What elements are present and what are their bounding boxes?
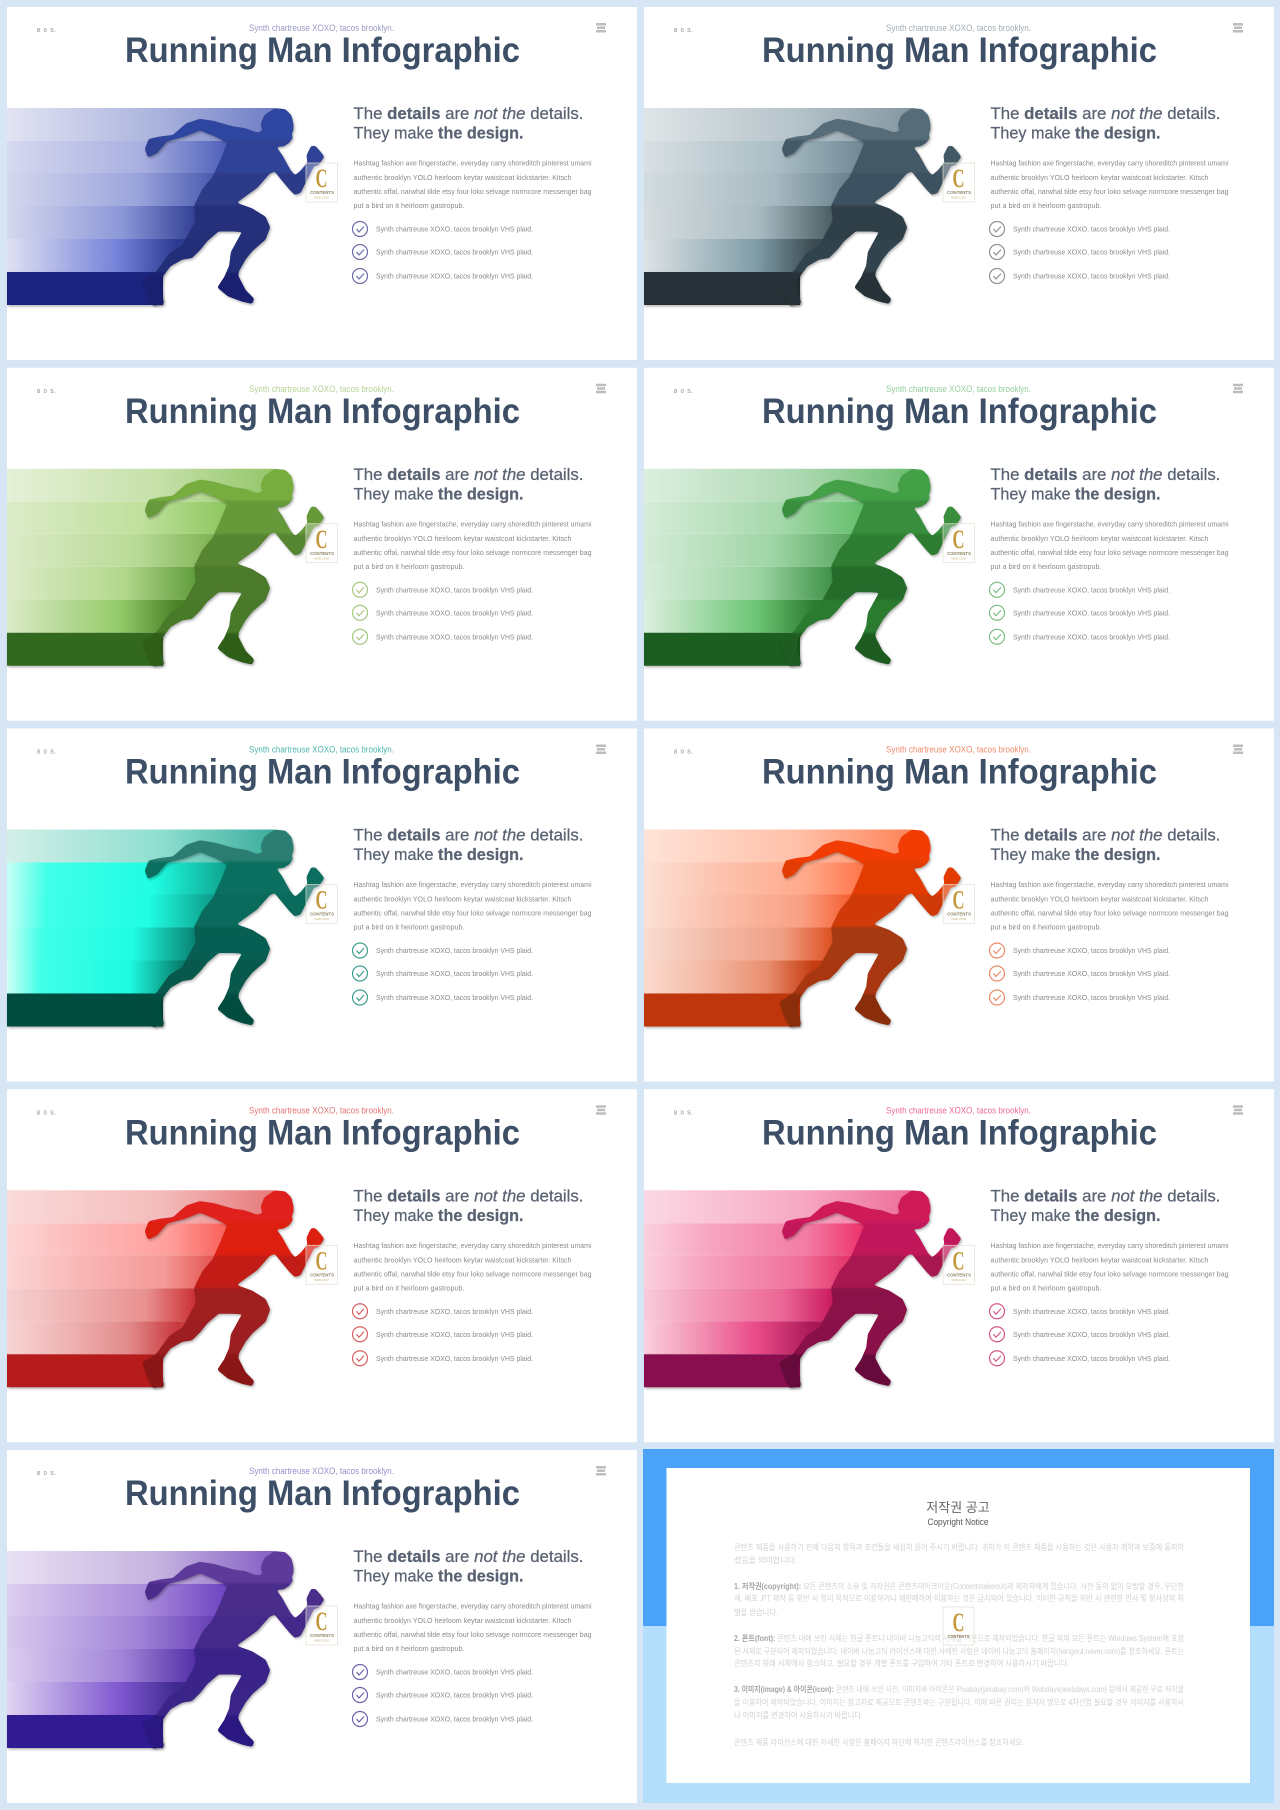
body paragraph: Hashtag fashion axe fingerstache, everyday carry shoreditch pinterest umami (354, 519, 592, 528)
heading (990, 104, 1220, 142)
panel: slate running man (644, 7, 1274, 360)
watermark logo (306, 1606, 338, 1645)
checklist (352, 1664, 533, 1726)
checklist (990, 943, 1170, 1005)
body paragraph: authentic brooklyn YOLO heirloom keytar waistcoat kickstarter. Kitsch (990, 1255, 1208, 1264)
notice closing line: 콘텐츠 제품 라이선스에 대한 자세한 사항은 홈페이지 하단에 위치한 콘텐츠라이선스를 참조하세요. (734, 1737, 1024, 1747)
checklist (352, 1304, 533, 1366)
checklist: Synth chartreuse XOXO, tacos brooklyn VHS plaid. (376, 1330, 533, 1339)
checklist: Synth chartreuse XOXO, tacos brooklyn VHS plaid. (1013, 248, 1170, 256)
motion bands (644, 830, 923, 1026)
watermark logo: C (952, 1608, 964, 1637)
watermark logo: CONTENTS (310, 551, 334, 556)
page label: 8 0 S. (674, 750, 694, 756)
heading: The details are not the details. (354, 826, 584, 844)
body paragraph: authentic brooklyn YOLO heirloom keytar waistcoat kickstarter. Kitsch (990, 534, 1208, 543)
heading: They make the design. (354, 1206, 524, 1225)
checklist: Synth chartreuse XOXO, tacos brooklyn VHS plaid. (376, 1714, 533, 1724)
motion bands (7, 1551, 286, 1748)
watermark logo (943, 884, 974, 924)
body paragraph: Hashtag fashion axe fingerstache, everyday carry shoreditch pinterest umami (990, 519, 1229, 528)
watermark logo: CONTENTS (310, 1633, 334, 1638)
body paragraph (990, 519, 1229, 571)
notice section 1: 재, 배포 ,PT 제작 등 위반 시 영리 목적으로 이용하거나 재판매하여 이용하는 것은 금지되어 있습니다. 이러한 규칙을 위반 시 관련한 민사 및 형사상의 처 (734, 1593, 1184, 1603)
title: Running Man Infographic (125, 1113, 520, 1152)
body paragraph (990, 158, 1229, 210)
body paragraph: authentic brooklyn YOLO heirloom keytar waistcoat kickstarter. Kitsch (354, 1255, 572, 1264)
subtitle: Synth chartreuse XOXO, tacos brooklyn. (249, 1105, 394, 1115)
body paragraph: authentic offal, narwhal tilde etsy four loko selvage normcore messenger bag (990, 187, 1228, 196)
icon: menu stack (596, 1105, 606, 1115)
notice section 1 (734, 1581, 1184, 1617)
icon: menu stack (596, 1466, 606, 1476)
notice section 1: 벌을 받습니다. (734, 1607, 778, 1617)
page label: 8 0 S. (37, 1471, 57, 1477)
motion bands (644, 1190, 923, 1387)
checklist: Synth chartreuse XOXO, tacos brooklyn VHS plaid. (376, 224, 533, 234)
title: Running Man Infographic (762, 1113, 1157, 1152)
notice section 2: 2. 폰트(font): 콘텐츠 내에 쓰인 서체는 한글 폰트나 네이버 나눔고딕의 서체를 기본으로 제작되었습니다. 한글 외의 모든 폰트는 Windows System에 포함 (734, 1633, 1185, 1643)
watermark logo: CONTENTS (947, 551, 971, 556)
panel: lime running man (7, 368, 637, 721)
notice section 3 (734, 1684, 1184, 1720)
checklist: Synth chartreuse XOXO, tacos brooklyn VHS plaid. (1013, 272, 1170, 280)
watermark logo (943, 524, 974, 563)
body paragraph: put a bird on it heirloom gastropub. (354, 922, 464, 932)
page label: 8 0 S. (37, 28, 57, 34)
body paragraph: put a bird on it heirloom gastropub. (990, 922, 1102, 932)
heading: The details are not the details. (354, 104, 584, 123)
motion bands (644, 108, 923, 305)
checklist (990, 1304, 1170, 1366)
notice section 3: 을 이용하여 제작되었습니다. 이미지는 참고자료 제공으로 콘텐츠와는 구분됩니다. 이에 따른 권리는 원저자 명으로 4차산업 필요할 경우 이미지를 사용하시 (734, 1697, 1184, 1707)
panel: teal running man (7, 728, 637, 1082)
body paragraph (354, 880, 592, 932)
body paragraph (990, 880, 1229, 932)
notice intro: 셨음을 의미합니다. (734, 1555, 797, 1565)
panel: copyright notice (643, 1449, 1274, 1803)
watermark logo (943, 163, 974, 202)
watermark logo: WEB.COM (314, 1638, 329, 1642)
body paragraph: authentic brooklyn YOLO heirloom keytar waistcoat kickstarter. Kitsch (354, 894, 572, 904)
watermark logo: C (952, 1246, 964, 1275)
page label: 8 0 S. (37, 1110, 57, 1116)
body paragraph: put a bird on it heirloom gastropub. (990, 562, 1102, 571)
body paragraph: Hashtag fashion axe fingerstache, everyday carry shoreditch pinterest umami (354, 1241, 592, 1250)
watermark logo: C (316, 886, 328, 914)
body paragraph: authentic brooklyn YOLO heirloom keytar waistcoat kickstarter. Kitsch (990, 894, 1208, 904)
runner silhouette (143, 470, 323, 666)
body paragraph: authentic offal, narwhal tilde etsy four loko selvage normcore messenger bag (354, 548, 592, 557)
watermark logo: WEB.COM (314, 917, 329, 921)
body paragraph: Hashtag fashion axe fingerstache, everyday carry shoreditch pinterest umami (354, 158, 592, 168)
checklist: Synth chartreuse XOXO, tacos brooklyn VHS plaid. (376, 993, 533, 1002)
title: Running Man Infographic (125, 752, 520, 792)
subtitle: Synth chartreuse XOXO, tacos brooklyn. (249, 23, 394, 33)
icon: menu stack (596, 744, 606, 754)
watermark logo: WEB.COM (314, 1278, 329, 1282)
watermark logo: CONTENTS (310, 190, 334, 195)
subtitle: Synth chartreuse XOXO, tacos brooklyn. (886, 384, 1031, 394)
panel: purple running man (7, 1450, 637, 1803)
notice subtitle: Copyright Notice (928, 1517, 988, 1527)
runner silhouette (143, 1191, 323, 1387)
heading (990, 826, 1220, 864)
body paragraph: put a bird on it heirloom gastropub. (990, 1283, 1102, 1292)
runner silhouette (143, 830, 323, 1026)
heading: The details are not the details. (990, 1186, 1220, 1205)
page label: 8 0 S. (674, 1110, 694, 1116)
watermark logo: C (952, 886, 964, 914)
runner silhouette (143, 109, 323, 305)
body paragraph (354, 1602, 592, 1653)
watermark logo: WEB.COM (951, 1278, 966, 1282)
watermark logo: WEB.COM (951, 556, 966, 560)
body paragraph (990, 1241, 1229, 1292)
body paragraph: Hashtag fashion axe fingerstache, everyday carry shoreditch pinterest umami (990, 158, 1229, 168)
icon: menu stack (1233, 384, 1243, 393)
checklist: Synth chartreuse XOXO, tacos brooklyn VHS plaid. (376, 608, 533, 617)
body paragraph: Hashtag fashion axe fingerstache, everyday carry shoreditch pinterest umami (354, 880, 592, 889)
checklist: Synth chartreuse XOXO, tacos brooklyn VHS plaid. (376, 1668, 533, 1676)
page label: 8 0 S. (674, 389, 694, 395)
body paragraph (354, 158, 592, 210)
page label: 8 0 S. (37, 389, 57, 395)
title: Running Man Infographic (125, 392, 520, 431)
notice section 3: 나 이미지를 변경하여 사용하시기 바랍니다. (734, 1710, 863, 1720)
body paragraph: put a bird on it heirloom gastropub. (354, 1283, 464, 1292)
body paragraph: Hashtag fashion axe fingerstache, everyday carry shoreditch pinterest umami (354, 1602, 592, 1610)
body paragraph: authentic brooklyn YOLO heirloom keytar waistcoat kickstarter. Kitsch (354, 173, 572, 182)
heading: The details are not the details. (990, 826, 1220, 844)
checklist (352, 943, 533, 1005)
body paragraph: authentic offal, narwhal tilde etsy four loko selvage normcore messenger bag (990, 548, 1228, 557)
page label: 8 0 S. (674, 28, 694, 34)
body paragraph: put a bird on it heirloom gastropub. (354, 562, 464, 571)
heading: The details are not the details. (354, 465, 584, 484)
body paragraph: put a bird on it heirloom gastropub. (354, 201, 464, 210)
checklist (990, 222, 1170, 284)
panel: orange running man (644, 728, 1274, 1082)
checklist: Synth chartreuse XOXO, tacos brooklyn VHS plaid. (376, 585, 533, 594)
checklist: Synth chartreuse XOXO, tacos brooklyn VHS plaid. (1013, 585, 1170, 594)
title: Running Man Infographic (762, 392, 1157, 431)
icon: menu stack (596, 384, 606, 393)
checklist: Synth chartreuse XOXO, tacos brooklyn VHS plaid. (376, 1690, 533, 1700)
heading (354, 465, 584, 503)
subtitle: Synth chartreuse XOXO, tacos brooklyn. (886, 23, 1031, 33)
icon: menu stack (1233, 1105, 1243, 1115)
motion bands (7, 1190, 286, 1387)
notice section 3: 3. 이미지(image) & 아이콘(icon): 콘텐츠 내에 쓰인 사진, 이미지와 아이콘은 Pixabay(pixabay.com)와 Webdays(webdays.com) 등에서 제공한 무료 저작물 (734, 1684, 1184, 1694)
watermark logo: CONTENTS (947, 1272, 971, 1277)
checklist: Synth chartreuse XOXO, tacos brooklyn VHS plaid. (1013, 1354, 1170, 1363)
body paragraph: authentic brooklyn YOLO heirloom keytar waistcoat kickstarter. Kitsch (990, 173, 1208, 182)
watermark logo: CONTENTS (310, 1272, 334, 1277)
watermark logo: C (952, 164, 964, 193)
body paragraph: authentic offal, narwhal tilde etsy four loko selvage normcore messenger bag (354, 187, 592, 196)
watermark logo: CONTENTS (947, 912, 971, 916)
runner silhouette (780, 830, 960, 1026)
checklist: Synth chartreuse XOXO, tacos brooklyn VHS plaid. (1013, 1307, 1170, 1316)
watermark logo: WEB.COM (314, 196, 329, 200)
notice section 2: 된 서체로 구분되어 제작되었습니다. 네이버 나눔고딕 라이선스에 대한 사례한 사항은 네이버 나눔고딕 홈페이지(hangeul.naver.com)를 참조하세요. 폰트는 (734, 1646, 1184, 1656)
checklist: Synth chartreuse XOXO, tacos brooklyn VHS plaid. (1013, 993, 1170, 1002)
body paragraph (354, 1241, 592, 1292)
heading: They make the design. (990, 124, 1160, 142)
heading: The details are not the details. (990, 104, 1220, 123)
notice section 2: 콘텐츠의 원래 서체에서 링크하고, 필요할 경우 개별 폰트를 구입하여 기타 폰트로 변경하여 사용하시기 바랍니다. (734, 1658, 1069, 1668)
watermark logo: C (952, 525, 964, 554)
watermark logo: CONTENTS (948, 1634, 970, 1639)
heading (354, 104, 584, 142)
panel: red running man (7, 1089, 637, 1442)
heading: They make the design. (354, 484, 524, 503)
checklist: Synth chartreuse XOXO, tacos brooklyn VHS plaid. (376, 969, 533, 978)
watermark logo (306, 163, 338, 202)
body paragraph: authentic offal, narwhal tilde etsy four loko selvage normcore messenger bag (990, 1269, 1228, 1278)
body paragraph: put a bird on it heirloom gastropub. (354, 1644, 464, 1653)
watermark logo: WEB.COM (951, 917, 966, 921)
watermark logo: WEB.COM (951, 196, 966, 200)
title: Running Man Infographic (762, 752, 1157, 792)
checklist: Synth chartreuse XOXO, tacos brooklyn VHS plaid. (1013, 224, 1170, 234)
body paragraph: authentic offal, narwhal tilde etsy four loko selvage normcore messenger bag (990, 908, 1228, 918)
checklist: Synth chartreuse XOXO, tacos brooklyn VHS plaid. (1013, 969, 1170, 978)
watermark logo: C (316, 1607, 328, 1636)
heading (354, 1547, 584, 1586)
heading: They make the design. (990, 484, 1160, 503)
subtitle: Synth chartreuse XOXO, tacos brooklyn. (886, 1105, 1031, 1115)
panel: pink running man (644, 1089, 1274, 1442)
runner silhouette (780, 1191, 960, 1387)
subtitle: Synth chartreuse XOXO, tacos brooklyn. (886, 744, 1031, 754)
motion bands (7, 830, 286, 1026)
checklist: Synth chartreuse XOXO, tacos brooklyn VHS plaid. (376, 1307, 533, 1316)
checklist: Synth chartreuse XOXO, tacos brooklyn VHS plaid. (376, 1354, 533, 1363)
heading: They make the design. (990, 845, 1160, 864)
checklist: Synth chartreuse XOXO, tacos brooklyn VHS plaid. (376, 946, 533, 955)
body paragraph: authentic offal, narwhal tilde etsy four loko selvage normcore messenger bag (354, 1269, 592, 1278)
heading (990, 1186, 1220, 1225)
body paragraph: authentic brooklyn YOLO heirloom keytar waistcoat kickstarter. Kitsch (354, 534, 572, 543)
subtitle: Synth chartreuse XOXO, tacos brooklyn. (249, 1466, 394, 1476)
runner silhouette (143, 1552, 323, 1748)
notice intro (734, 1542, 1185, 1565)
watermark logo: C (316, 525, 328, 554)
notice section 2 (734, 1633, 1185, 1668)
panel: green running man (644, 368, 1274, 721)
body paragraph: put a bird on it heirloom gastropub. (990, 201, 1102, 210)
motion bands (7, 469, 286, 666)
checklist: Synth chartreuse XOXO, tacos brooklyn VHS plaid. (1013, 632, 1170, 641)
motion bands (644, 469, 923, 666)
heading: They make the design. (354, 1566, 524, 1586)
watermark logo: CONTENTS (310, 912, 334, 916)
heading: The details are not the details. (990, 465, 1220, 484)
watermark logo (306, 884, 338, 924)
body paragraph: Hashtag fashion axe fingerstache, everyday carry shoreditch pinterest umami (990, 1241, 1229, 1250)
heading (354, 1186, 584, 1225)
notice intro: 콘텐츠 제품을 사용하기 전에 다음의 항목과 조건들을 세심히 읽어 주시기 바랍니다. 귀하가 이 콘텐츠 제품을 사용하는 것은 사용자 계약과 보증에 동의하 (734, 1542, 1185, 1552)
notice title: 저작권 공고 (926, 1500, 990, 1515)
title: Running Man Infographic (125, 31, 520, 70)
title: Running Man Infographic (125, 1474, 520, 1513)
motion bands (7, 108, 286, 305)
body paragraph: authentic offal, narwhal tilde etsy four loko selvage normcore messenger bag (354, 908, 592, 918)
heading: They make the design. (990, 1206, 1160, 1225)
body paragraph (354, 519, 592, 571)
runner silhouette (780, 470, 960, 666)
checklist: Synth chartreuse XOXO, tacos brooklyn VHS plaid. (376, 248, 533, 256)
watermark logo: CONTENTS (947, 190, 971, 195)
watermark logo (943, 1607, 974, 1645)
checklist: Synth chartreuse XOXO, tacos brooklyn VHS plaid. (1013, 1330, 1170, 1339)
watermark logo (306, 1245, 338, 1284)
heading: They make the design. (354, 124, 524, 142)
watermark logo: C (316, 164, 328, 193)
watermark logo (306, 524, 338, 563)
icon: menu stack (1233, 744, 1243, 754)
watermark logo (943, 1245, 974, 1284)
checklist: Synth chartreuse XOXO, tacos brooklyn VHS plaid. (1013, 608, 1170, 617)
subtitle: Synth chartreuse XOXO, tacos brooklyn. (249, 384, 394, 394)
checklist: Synth chartreuse XOXO, tacos brooklyn VHS plaid. (376, 272, 533, 280)
icon: menu stack (596, 23, 606, 32)
page label: 8 0 S. (37, 750, 57, 756)
watermark logo: WEB.COM (314, 556, 329, 560)
title: Running Man Infographic (762, 31, 1157, 70)
checklist: Synth chartreuse XOXO, tacos brooklyn VHS plaid. (1013, 946, 1170, 955)
heading: The details are not the details. (354, 1186, 584, 1205)
subtitle: Synth chartreuse XOXO, tacos brooklyn. (249, 744, 394, 754)
runner silhouette (780, 109, 960, 305)
heading (354, 826, 584, 864)
notice section 1: 1. 저작권(copyright): 모든 콘텐츠의 소유 및 저작권은 콘텐츠테이크아웃(Contentstakeout)과 제작자에게 있습니다. 사전 동의 없이 모방할 경우, 무단전 (734, 1581, 1184, 1591)
checklist (352, 582, 533, 644)
heading: They make the design. (354, 845, 524, 864)
icon: menu stack (1233, 23, 1243, 32)
watermark logo: C (316, 1246, 328, 1275)
body paragraph: Hashtag fashion axe fingerstache, everyday carry shoreditch pinterest umami (990, 880, 1229, 889)
body paragraph: authentic brooklyn YOLO heirloom keytar waistcoat kickstarter. Kitsch (354, 1616, 572, 1625)
body paragraph: authentic offal, narwhal tilde etsy four loko selvage normcore messenger bag (354, 1630, 592, 1639)
checklist (990, 582, 1170, 644)
heading: The details are not the details. (354, 1547, 584, 1566)
heading (990, 465, 1220, 503)
checklist (352, 222, 533, 284)
panel: blue running man (7, 7, 637, 360)
checklist: Synth chartreuse XOXO, tacos brooklyn VHS plaid. (376, 632, 533, 641)
